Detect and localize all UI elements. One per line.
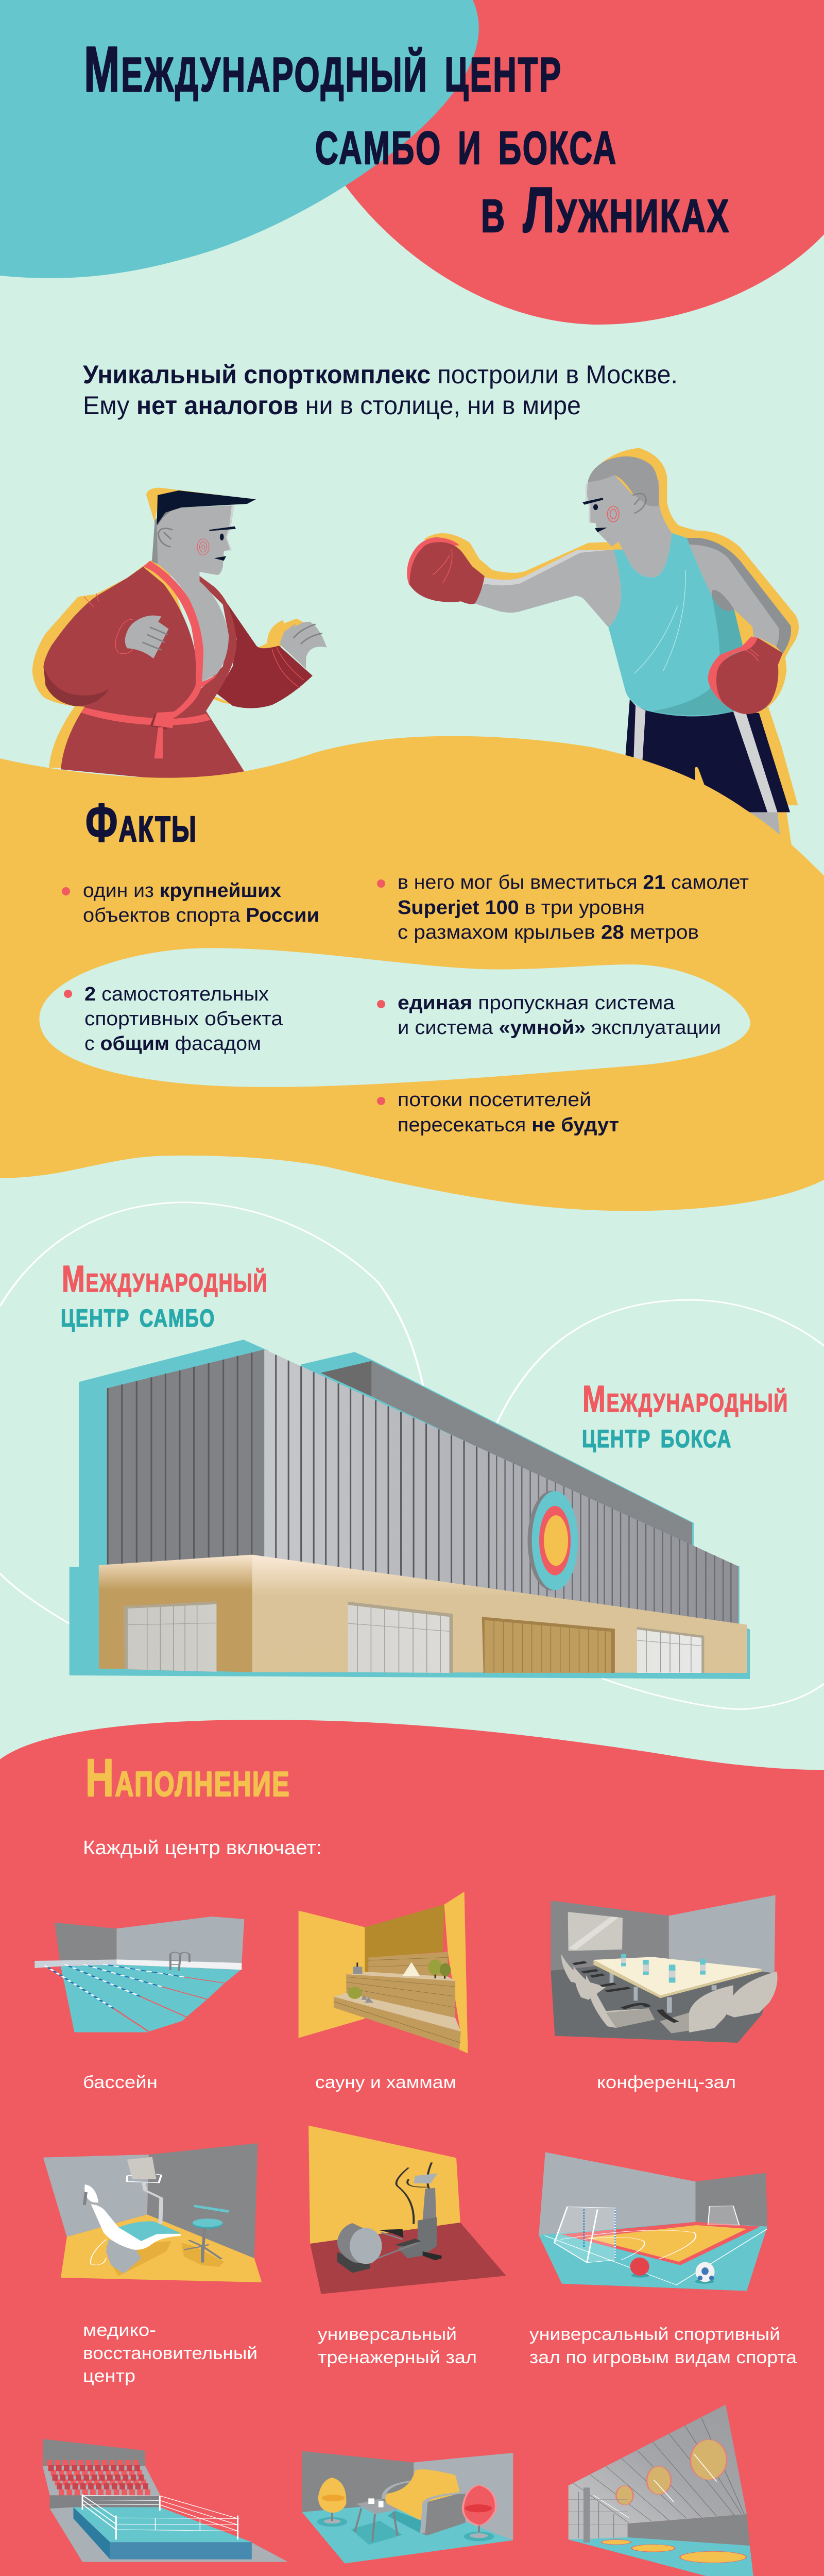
fact: largest: объектов спорта России [83,905,319,926]
fact: visitor flows [377,1089,619,1136]
illustration: sambo wrestler [32,488,327,783]
room: sauna [299,1892,468,2054]
room: training hall [569,2404,755,2576]
fact: two objects [64,984,283,1055]
label: medical: восстановительный [83,2344,258,2363]
coral blob [0,1720,824,2576]
mint inner blob [39,948,750,1087]
label: medical: медико- [83,2320,156,2340]
title: МЕЖДУНАРОДНЫЙ ЦЕНТР [84,34,562,105]
illustration: building [70,1340,750,1679]
illustration: boxer [407,448,799,857]
label: boxing center: ЦЕНТР БОКСА [582,1426,732,1453]
intro text: Ему нет аналогов ни в столице, ни в мире [83,391,581,420]
label: gym [318,2325,477,2367]
title: САМБО И БОКСА [315,123,617,174]
fact: largest: один из крупнейших [83,880,281,902]
fact: two objects: 2 самостоятельных [84,984,269,1005]
label: boxing center [582,1379,788,1453]
heading: facts: ФАКТЫ [85,793,197,853]
intro text: Уникальный спорткомплекс построили в Москве. [83,360,678,389]
label: sambo center: МЕЖДУНАРОДНЫЙ [62,1259,268,1300]
intro text [83,360,678,420]
label: sambo center [61,1259,268,1332]
fact: superjet: с размахом крыльев 28 метров [398,922,699,943]
fact: access system: единая пропускная система [398,992,675,1014]
intro line: Каждый центр включает: [83,1837,322,1859]
fact: visitor flows: пересекаться не будут [398,1114,619,1136]
white outline blobs [0,1202,824,1709]
label: gym: тренажерный зал [318,2348,477,2367]
label: pool: бассейн [83,2073,158,2092]
fact: largest [62,880,319,926]
room: pool [35,1917,244,2032]
heading: contents: НАПОЛНЕНИЕ [85,1748,290,1807]
label: medical [83,2320,258,2386]
title [84,34,730,246]
yellow blob [0,736,824,1211]
fact: two objects: спортивных объекта [84,1008,283,1030]
room: gym [308,2126,506,2294]
fact: access system: и система «умной» эксплуатации [398,1017,721,1039]
fact: superjet: Superjet 100 в три уровня [398,897,645,919]
label: gym: универсальный [318,2325,457,2344]
panel: building [0,1202,824,1709]
label: sports hall: зал по игровым видам спорта [529,2348,797,2367]
fact: two objects: с общим фасадом [84,1033,261,1055]
teal blob [0,0,479,278]
label: sauna: сауну и хаммам [315,2073,456,2092]
room: sports hall [539,2152,767,2291]
label: medical: центр [83,2366,135,2386]
label: conference: конференц-зал [597,2073,736,2092]
label: sports hall: универсальный спортивный [529,2325,780,2344]
label: sports hall [529,2325,797,2367]
title: В ЛУЖНИКАХ [481,175,730,246]
fact: access system [377,992,721,1039]
room: arena [43,2439,288,2562]
fact: superjet [377,872,749,943]
coral blob [344,0,824,325]
room: rest room [302,2451,513,2564]
label: sambo center: ЦЕНТР САМБО [61,1305,215,1332]
room: conference [551,1895,778,2043]
fact: superjet: в него мог бы вместиться 21 самолет [398,872,749,893]
panel: contents [0,1720,824,2576]
header panel [0,0,824,325]
room: medical [43,2143,262,2282]
panel: facts [0,736,824,1211]
fact: visitor flows: потоки посетителей [398,1089,591,1111]
